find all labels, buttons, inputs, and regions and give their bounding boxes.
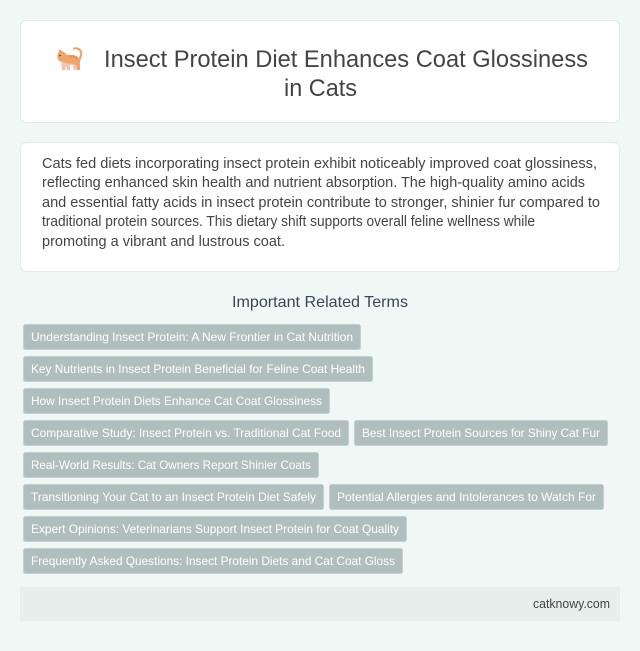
tag list bbox=[24, 324, 608, 574]
tag: key nutrients: Key Nutrients in Insect Protein Beneficial for Feline Coat Health bbox=[31, 362, 365, 376]
title bbox=[104, 46, 588, 102]
tag: expert opinions bbox=[24, 516, 406, 542]
tag: transitioning: Transitioning Your Cat to an Insect Protein Diet Safely bbox=[31, 490, 316, 504]
tag: faq: Frequently Asked Questions: Insect Protein Diets and Cat Coat Gloss bbox=[31, 554, 395, 568]
heading: important related terms: Important Related Terms bbox=[232, 294, 408, 311]
panel: title card bbox=[20, 20, 620, 122]
tag: allergies bbox=[330, 484, 604, 510]
panel: summary text: promoting a vibrant and lustrous coat. bbox=[42, 234, 285, 250]
tag: comparative study bbox=[24, 420, 348, 446]
footer bar bbox=[20, 587, 620, 621]
footer bar: catknowy.com bbox=[533, 597, 610, 611]
icon: cat bbox=[57, 48, 81, 70]
tag: allergies: Potential Allergies and Intolerances to Watch For bbox=[337, 490, 596, 504]
tag: key nutrients bbox=[24, 356, 372, 382]
tag: expert opinions: Expert Opinions: Veterinarians Support Insect Protein for Coat Quality bbox=[31, 522, 399, 536]
tag: understanding insect protein: Understanding Insect Protein: A New Frontier in Cat Nutrition bbox=[31, 330, 353, 344]
panel: summary text bbox=[20, 142, 620, 272]
panel: summary text: traditional protein sources. This dietary shift supports overall feline wellness while bbox=[42, 214, 535, 230]
panel: summary text: reflecting enhanced skin health and nutrient absorption. The high-quality amino acids bbox=[42, 175, 585, 191]
tag: how diets enhance: How Insect Protein Diets Enhance Cat Coat Glossiness bbox=[31, 394, 322, 408]
tag: faq bbox=[24, 548, 402, 574]
tag: best sources: Best Insect Protein Sources for Shiny Cat Fur bbox=[362, 426, 600, 440]
panel: summary text: Cats fed diets incorporating insect protein exhibit noticeably improved coat glossiness, bbox=[42, 156, 597, 172]
tag: real-world results: Real-World Results: Cat Owners Report Shinier Coats bbox=[31, 458, 311, 472]
tag: understanding insect protein bbox=[24, 324, 360, 350]
tag: how diets enhance bbox=[24, 388, 330, 414]
tag: real-world results bbox=[24, 452, 318, 478]
title: Insect Protein Diet Enhances Coat Glossiness bbox=[104, 46, 588, 73]
tag: transitioning bbox=[24, 484, 324, 510]
tag: comparative study: Comparative Study: Insect Protein vs. Traditional Cat Food bbox=[31, 426, 341, 440]
panel: summary text: and essential fatty acids in insect protein contribute to stronger, shinier fur compared to bbox=[42, 195, 600, 211]
tag: best sources bbox=[354, 420, 608, 446]
title: in Cats bbox=[284, 75, 357, 102]
